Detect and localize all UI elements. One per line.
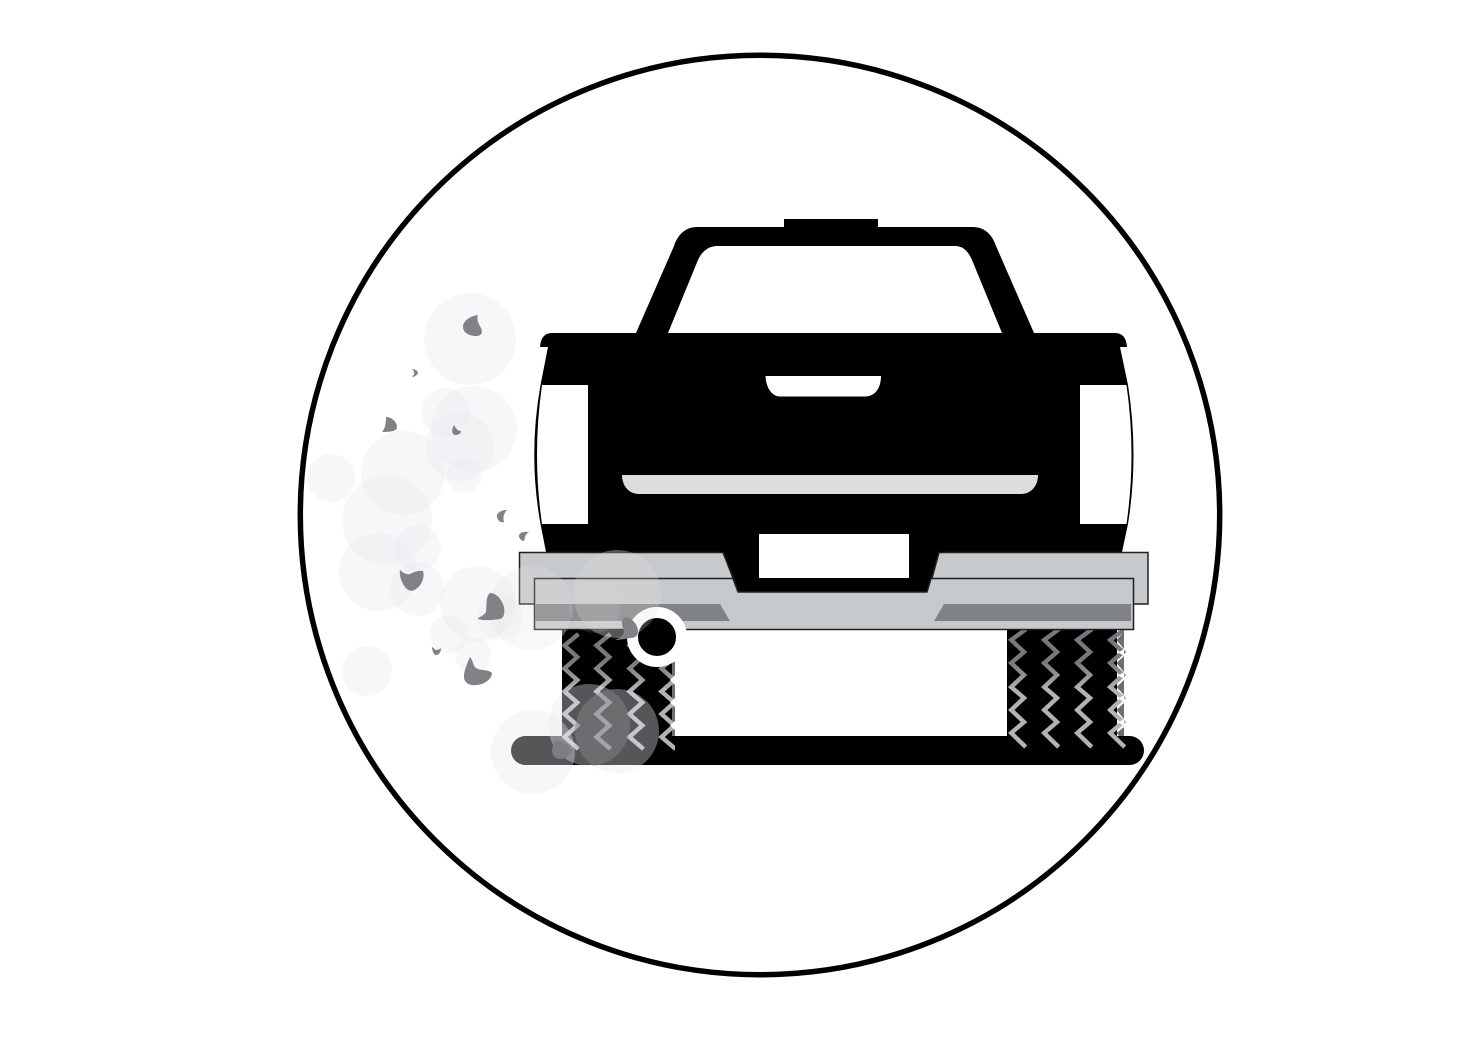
smoke clouds bbox=[307, 293, 659, 794]
left tail light bbox=[537, 385, 588, 524]
right tail light bbox=[1080, 385, 1132, 524]
outer circle bbox=[300, 55, 1220, 975]
upper bumper left bbox=[520, 552, 733, 604]
tailgate handle bbox=[766, 376, 881, 396]
rear window bbox=[668, 246, 1002, 333]
bumper shadow left bbox=[535, 604, 730, 621]
lower bumper bbox=[534, 578, 1134, 630]
ground bar bbox=[511, 736, 1144, 765]
smoke overlap shade bbox=[575, 690, 630, 766]
right tire bbox=[1007, 630, 1124, 742]
license plate bbox=[759, 534, 909, 578]
left tire edge notches bbox=[670, 651, 676, 731]
tailgate trim strip bbox=[622, 475, 1038, 494]
truck body bbox=[534, 219, 1134, 600]
upper bumper right bbox=[932, 552, 1148, 604]
smoke over truck body bbox=[534, 550, 642, 638]
soot particles bbox=[382, 315, 638, 759]
right tire tread bbox=[1011, 629, 1125, 747]
bumper shadow right bbox=[934, 604, 1131, 621]
right tire edge notches bbox=[1118, 630, 1127, 736]
left tire tread bbox=[564, 634, 676, 749]
left tire bbox=[562, 630, 675, 740]
exhaust pipe bbox=[632, 612, 682, 662]
smoke over bumper bbox=[477, 550, 661, 650]
